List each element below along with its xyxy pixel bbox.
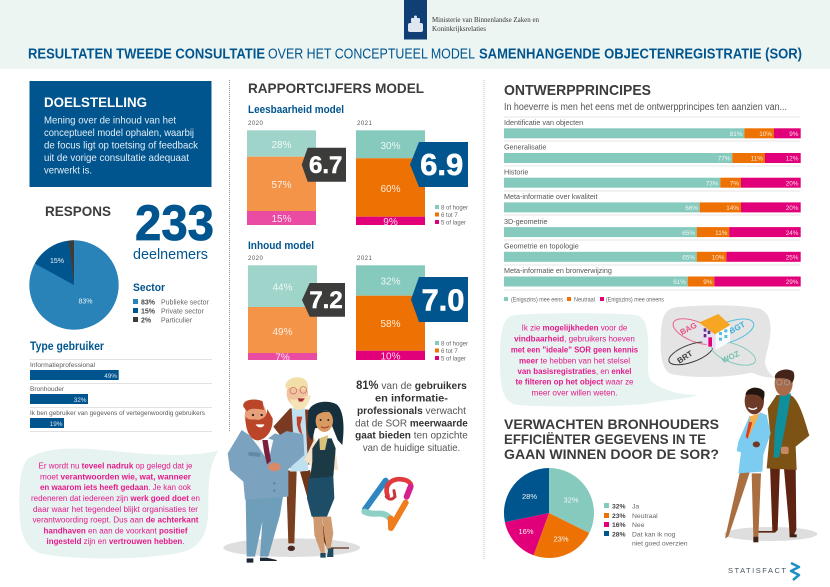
chart group: leesbaarheid model	[247, 104, 468, 228]
stacked bar chart: ontwerpprincipes: 73%	[706, 180, 719, 187]
quote bubble: left: moet verantwoorden wie, wat, wanneer	[40, 472, 191, 481]
stacked bar chart: ontwerpprincipes: 11%	[715, 230, 728, 237]
subheading: In hoeverre is men het eens met de ontwerpprincipes ten aanzien van...	[504, 102, 787, 113]
stacked bar chart: ontwerpprincipes: 20%	[786, 180, 799, 187]
stacked bar chart: ontwerpprincipes: 77%	[718, 156, 731, 163]
legend: sector: Particulier	[161, 318, 193, 324]
chart group: inhoud model: 49%	[272, 327, 293, 338]
chart group: leesbaarheid model: 2020	[248, 121, 264, 127]
heading: verwachten bronhouders: GAAN WINNEN DOOR DE SOR?	[504, 446, 719, 462]
quote bubble: left: handhaven en aan de voorkant positief	[44, 526, 188, 535]
legend: ontwerpprincipes: Neutraal	[574, 298, 595, 304]
quote bubble: right: vindbaarheid, gebruikers hoeven	[514, 335, 635, 344]
heading: verwachten bronhouders	[504, 416, 719, 462]
chart group: inhoud model: 7.2	[309, 287, 343, 314]
stacked bar chart: ontwerpprincipes: 7%	[730, 180, 739, 187]
chart group: leesbaarheid model: 6.9	[420, 147, 463, 182]
legend: ontwerpprincipes	[504, 297, 664, 304]
chart group: inhoud model: 8 of hoger	[441, 342, 468, 348]
respondent count: 233	[135, 195, 214, 251]
legend: efficiency: Neutraal	[632, 513, 658, 520]
legend: efficiency	[604, 503, 688, 548]
title	[28, 46, 802, 62]
legend: efficiency: niet goed overzien	[632, 540, 688, 548]
chart group: leesbaarheid model: 30%	[380, 141, 401, 152]
chart group: inhoud model: 44%	[272, 282, 293, 294]
title: RESULTATEN TWEEDE CONSULTATIE	[28, 46, 265, 62]
thought bubble: registers and house	[661, 305, 775, 378]
pie chart: efficiency: 32%	[563, 496, 579, 504]
legend: efficiency: 16%	[612, 522, 626, 529]
panel: doelstelling	[30, 81, 212, 187]
chart group: leesbaarheid model: 2021	[357, 121, 373, 127]
chart group: inhoud model: 2020	[248, 256, 264, 262]
stacked bar chart: ontwerpprincipes: 10%	[759, 131, 772, 138]
legend: efficiency: 32%	[612, 504, 626, 510]
respondent count: deelnemers	[133, 246, 208, 263]
stacked bar chart: ontwerpprincipes: Identificatie van objecten	[504, 118, 583, 127]
legend: efficiency: 23%	[612, 513, 626, 520]
heading: rapportcijfers: RAPPORTCIJFERS MODEL	[248, 80, 424, 96]
pie chart: efficiency: 28%	[522, 492, 537, 501]
callout: 81 percent: professionals verwacht	[357, 405, 466, 417]
stacked bar chart: ontwerpprincipes: 24%	[786, 230, 799, 237]
callout: 81 percent: gaat bieden ten opzichte	[355, 430, 468, 442]
quote bubble: left: verantwoording roept. Dus aan de achterkant	[32, 516, 199, 525]
header band	[0, 0, 830, 69]
header band: Koninkrijksrelaties	[432, 26, 486, 33]
legend: efficiency: 28%	[612, 532, 626, 538]
heading: ontwerpprincipes: ONTWERPPRINCIPES	[504, 82, 651, 99]
quote bubble: right: meer over willen weten.	[532, 389, 618, 398]
pie chart: efficiency	[504, 468, 594, 558]
stacked bar chart: ontwerpprincipes: 14%	[726, 205, 739, 212]
chart group: inhoud model	[248, 240, 468, 364]
chart group: inhoud model: 58%	[380, 319, 401, 330]
chart group: leesbaarheid model: 6 tot 7	[441, 213, 458, 219]
quote bubble: right	[500, 313, 698, 407]
chart group: inhoud model: 7.0	[421, 283, 465, 318]
header band: Ministerie van Binnenlandse Zaken en	[432, 17, 540, 24]
legend: ontwerpprincipes: (Enigszins) mee oneens	[606, 298, 664, 304]
legend: sector: Private sector	[161, 308, 204, 316]
legend: sector: Publieke sector	[161, 300, 210, 306]
quote bubble: right: met een "ideale" SOR geen kennis	[511, 345, 639, 354]
illustration: three colleagues	[223, 377, 360, 563]
stacked bar chart: ontwerpprincipes: 65%	[682, 254, 695, 262]
heading: verwachten bronhouders: EFFICIËNTER GEGEVENS IN TE	[504, 431, 706, 447]
quote bubble: right: te filteren op het object waar ze	[516, 378, 634, 387]
thought bubble: registers and house: BAG	[679, 321, 698, 337]
callout: 81 percent	[355, 380, 468, 454]
legend: sector: Sector	[133, 282, 166, 294]
chart group: inhoud model: Inhoud model	[248, 240, 314, 252]
chart group: leesbaarheid model: 9%	[383, 217, 398, 228]
stacked bar chart: ontwerpprincipes: 11%	[751, 156, 763, 163]
stacked bar chart: ontwerpprincipes: 10%	[712, 254, 725, 262]
bar chart: type gebruiker: Informatieprofessional	[30, 362, 95, 369]
legend: efficiency: Nee	[632, 522, 645, 529]
callout: 81 percent: van de huidige situatie.	[363, 442, 460, 454]
stacked bar chart: ontwerpprincipes	[504, 117, 801, 290]
logo: statisfact: STATISFACT	[728, 566, 786, 575]
callout: 81 percent: en informatie-	[375, 393, 449, 405]
title: OVER HET CONCEPTUEEL MODEL	[268, 46, 475, 62]
chart group: inhoud model: 5 of lager	[441, 356, 466, 362]
panel: doelstelling: Mening over de inhoud van het	[44, 116, 176, 126]
chart group: leesbaarheid model: 8 of hoger	[441, 206, 468, 212]
stacked bar chart: ontwerpprincipes: 9%	[789, 131, 799, 138]
bar chart: type gebruiker: 32%	[74, 397, 87, 404]
stacked bar chart: ontwerpprincipes: 9%	[703, 279, 713, 286]
pie chart: efficiency: 16%	[518, 527, 534, 536]
legend: efficiency: Ja	[632, 504, 639, 510]
legend: sector: 83%	[141, 300, 156, 306]
chart group: leesbaarheid model: 57%	[271, 180, 292, 191]
panel: doelstelling: DOELSTELLING	[44, 94, 147, 110]
pie chart: efficiency: 23%	[553, 534, 569, 544]
illustration: two men	[724, 370, 817, 542]
stacked bar chart: ontwerpprincipes: 29%	[786, 279, 799, 286]
chart group: inhoud model: 7%	[275, 352, 290, 364]
panel: doelstelling: verwerkt is.	[44, 166, 92, 176]
chart group: inhoud model: 32%	[380, 276, 401, 288]
bar chart: type gebruiker: Bronhouder	[30, 386, 65, 393]
thought bubble: registers and house: WOZ	[720, 349, 741, 365]
legend: efficiency: Dat kan ik nog	[632, 532, 676, 538]
quote bubble: right: Ik zie mogelijkheden voor de	[522, 324, 628, 333]
quote bubble: right: meer te hebben van het stelsel	[519, 356, 630, 365]
quote bubble: left: en waarom iets heeft gedaan. Je kan ook	[40, 483, 192, 492]
callout: 81 percent: dat de SOR meerwaarde	[355, 418, 468, 430]
stacked bar chart: ontwerpprincipes: 12%	[786, 156, 799, 163]
stacked bar chart: ontwerpprincipes: Meta-informatie en bronverwijzing	[504, 266, 612, 275]
chart group: inhoud model: 2021	[357, 256, 373, 262]
panel: doelstelling: uit de vorige consultatie adequaat	[44, 153, 189, 164]
quote bubble: right: van basisregistraties, en enkel	[518, 367, 632, 376]
bar chart: type gebruiker: 49%	[104, 373, 117, 380]
quote bubble: left	[19, 448, 218, 558]
stacked bar chart: ontwerpprincipes: 25%	[786, 254, 799, 262]
quote bubble: left: daar waar het tegendeel blijkt organisaties ter	[33, 505, 198, 514]
stacked bar chart: ontwerpprincipes: 65%	[682, 230, 695, 237]
pie chart: sector: 83%	[78, 298, 93, 306]
title: SAMENHANGENDE OBJECTENREGISTRATIE (SOR)	[479, 46, 802, 62]
stacked bar chart: ontwerpprincipes: 3D-geometrie	[504, 217, 548, 226]
legend: sector: 2%	[141, 318, 152, 324]
icon: ribbon logo	[364, 479, 411, 528]
quote bubble: left: ingesteld zijn en vertrouwen hebben.	[46, 537, 184, 546]
stacked bar chart: ontwerpprincipes: 61%	[673, 279, 686, 286]
thought bubble: registers and house: BRT	[676, 349, 694, 365]
chart group: leesbaarheid model: Leesbaarheid model	[248, 104, 344, 116]
heading: respons: RESPONS	[45, 203, 111, 219]
thought bubble: registers and house: BGT	[728, 320, 747, 336]
bar chart: type gebruiker	[30, 341, 212, 432]
stacked bar chart: ontwerpprincipes: 66%	[685, 205, 698, 212]
pie chart: sector	[29, 240, 119, 330]
heading: verwachten bronhouders: VERWACHTEN BRONHOUDERS	[504, 416, 719, 432]
chart group: inhoud model: 10%	[380, 352, 401, 362]
bar chart: type gebruiker: Type gebruiker	[30, 341, 104, 353]
stacked bar chart: ontwerpprincipes: Historie	[504, 167, 528, 176]
callout: 81 percent: 81% van de gebruikers	[356, 380, 467, 392]
stacked bar chart: ontwerpprincipes: 20%	[786, 205, 799, 212]
stacked bar chart: ontwerpprincipes: Generalisatie	[504, 143, 546, 152]
stacked bar chart: ontwerpprincipes: Geometrie en topologie	[504, 242, 579, 250]
quote bubble: left: redeneren dat iedereen zijn werk goed doet en	[31, 494, 200, 503]
chart group: leesbaarheid model: 28%	[271, 140, 292, 151]
legend: sector: 15%	[141, 308, 156, 316]
chart group: leesbaarheid model: 15%	[271, 214, 292, 225]
chart group: leesbaarheid model: 5 of lager	[441, 220, 466, 226]
stacked bar chart: ontwerpprincipes: Meta-informatie over kwaliteit	[504, 192, 597, 201]
chart group: leesbaarheid model: 60%	[380, 184, 401, 195]
bar chart: type gebruiker: Ik ben gebruiker van gegevens of vertegenwoordig gebruikers	[30, 410, 205, 417]
stacked bar chart: ontwerpprincipes: 81%	[730, 131, 743, 138]
legend: ontwerpprincipes: (Enigszins) mee eens	[511, 298, 563, 304]
chart group: leesbaarheid model: 6.7	[309, 152, 342, 179]
chart group: inhoud model: 6 tot 7	[441, 349, 458, 355]
pie chart: sector: 15%	[50, 258, 64, 265]
logo: statisfact	[728, 563, 799, 580]
legend: sector	[133, 282, 210, 324]
panel: doelstelling: de focus ligt op toetsing of feedback	[44, 140, 199, 152]
quote bubble: left: Er wordt nu teveel nadruk op gelegd dat je	[38, 462, 193, 470]
panel: doelstelling: conceptueel model ophalen, waarbij	[44, 128, 194, 139]
bar chart: type gebruiker: 19%	[50, 421, 63, 428]
